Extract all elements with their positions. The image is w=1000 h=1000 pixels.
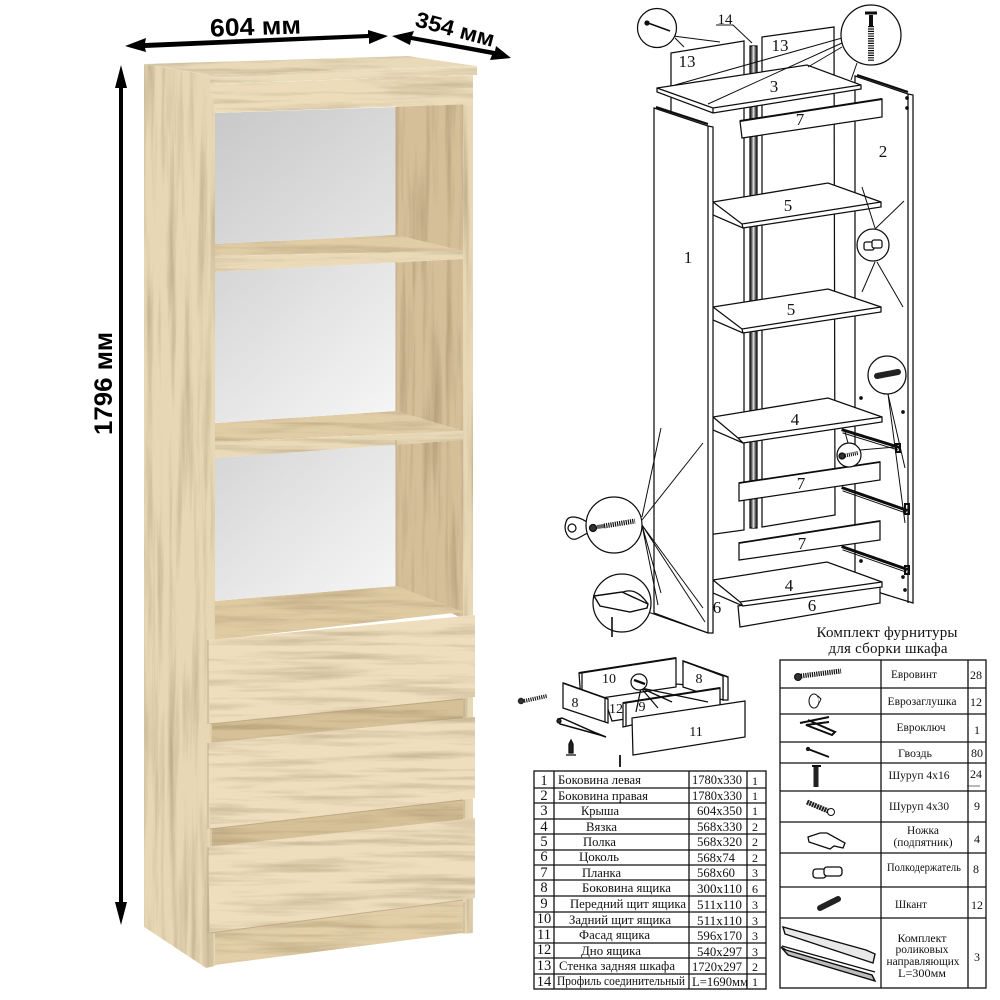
- icons: [781, 671, 875, 981]
- icon: euro screw: [794, 671, 841, 680]
- drawer runners: [843, 430, 909, 574]
- icon: shelf pin: [813, 867, 842, 878]
- hardware names: Полкодержатель: [887, 862, 961, 874]
- table quantities: 1: [752, 774, 758, 788]
- hardware names: роликовых: [896, 944, 949, 956]
- table quantities: 3: [752, 866, 758, 880]
- table row numbers: 11: [537, 927, 551, 943]
- table quantities: 1: [752, 975, 758, 989]
- drawer callout: [631, 674, 708, 712]
- part numbers on diagram: 5: [784, 196, 792, 215]
- callout: euro screw: [841, 5, 901, 65]
- hardware names: (подпятник): [894, 837, 953, 849]
- table part names: Стенка задняя шкафа: [559, 959, 675, 973]
- callout: dowel: [868, 356, 906, 394]
- callout: small screw: [837, 443, 861, 467]
- right front post: [463, 80, 473, 934]
- leader lines: [642, 36, 905, 633]
- drawer 3: [208, 818, 475, 933]
- heading: hardware kit: Комплект фурнитуры: [816, 625, 958, 641]
- table sizes: 1720х297: [692, 960, 742, 974]
- heading: hardware kit: [816, 625, 958, 657]
- dimension: depth arrow and label: 354 мм: [413, 7, 497, 52]
- drawer part numbers: 12: [609, 702, 623, 717]
- table row numbers: 5: [540, 834, 548, 850]
- table part names: Боковина правая: [558, 789, 648, 803]
- hardware names: Шуруп 4х16: [888, 770, 950, 782]
- hardware quantities: 12: [971, 898, 983, 912]
- drawer part numbers: [572, 672, 703, 740]
- plinth 6: [738, 583, 880, 627]
- table sizes: 1780х330: [692, 773, 742, 787]
- dimension: height arrow and label: [90, 65, 127, 925]
- hardware quantities: 3: [974, 950, 980, 964]
- table part names: Фасад ящика: [579, 928, 650, 942]
- dimension: depth arrow and label: [392, 7, 511, 60]
- icon: nail: [806, 747, 829, 757]
- icon: foot: [808, 833, 845, 849]
- hardware names: Евроключ: [896, 722, 946, 734]
- table part names: Крыша: [581, 804, 619, 818]
- table sizes: 568х320: [697, 835, 742, 849]
- part numbers on diagram: 13: [678, 52, 696, 71]
- drawer left side 8: [563, 683, 608, 723]
- hardware quantities: 9: [974, 799, 980, 813]
- icon: euro key: [800, 717, 835, 735]
- left side panel 1: [654, 107, 713, 633]
- table quantities: 3: [752, 945, 758, 959]
- drawer gaps and plinth: [212, 697, 463, 965]
- table row numbers: 6: [540, 849, 548, 865]
- table part names: Планка: [582, 866, 621, 880]
- icon: euro cap: [809, 694, 821, 708]
- hardware names: направляющих: [886, 956, 960, 968]
- hardware names: Шуруп 4х30: [889, 801, 949, 813]
- part numbers on diagram: 7: [796, 110, 805, 129]
- table part names: [557, 773, 686, 988]
- table part names: Передний щит ящика: [570, 897, 686, 911]
- table part names: Цоколь: [579, 850, 619, 864]
- drawer part numbers: 10: [602, 672, 616, 687]
- hardware names: [886, 669, 961, 980]
- table quantities: 2: [752, 960, 758, 974]
- table row numbers: [537, 773, 552, 990]
- table: hardware kit: [780, 660, 986, 988]
- table part names: Боковина левая: [558, 773, 641, 787]
- stray mark: [619, 755, 621, 767]
- left outer side panel: [144, 64, 215, 968]
- table row numbers: 10: [537, 911, 551, 927]
- table sizes: L=1690мм: [692, 975, 748, 989]
- table part names: Полка: [583, 835, 616, 849]
- back panels 13: [671, 27, 835, 540]
- hardware quantities: 4: [974, 832, 980, 846]
- hardware names: L=300мм: [898, 968, 947, 980]
- hardware quantities: [970, 668, 983, 964]
- hardware names: Гвоздь: [898, 748, 932, 760]
- hardware quantities: 24: [970, 767, 982, 781]
- lower shelf: [215, 411, 463, 458]
- callout: shelf pin: [857, 229, 889, 261]
- hardware quantities: 80: [971, 746, 983, 760]
- drawer exploded diagram: [518, 658, 745, 767]
- hardware names: Ножка: [907, 825, 939, 837]
- table quantities: 3: [752, 898, 758, 912]
- hardware names: Комплект: [898, 933, 946, 945]
- table row numbers: 4: [540, 819, 548, 835]
- part numbers on diagram: 6: [713, 598, 721, 617]
- part numbers on diagram: 13: [772, 36, 788, 55]
- callout: euro screw with key: [565, 497, 642, 553]
- tie 4 upper: [713, 398, 882, 443]
- table sizes: 604х350: [697, 804, 742, 818]
- table quantities: 2: [752, 851, 758, 865]
- drawer front 9: [623, 688, 720, 727]
- shelf 5 lower: [713, 289, 881, 333]
- drawer 1: [208, 615, 475, 724]
- heading: hardware kit: для сборки шкафа: [828, 641, 948, 657]
- table: parts list: [534, 771, 766, 990]
- hardware names: Евровинт: [891, 669, 937, 681]
- drawer right side 8: [683, 661, 728, 700]
- top rail: [210, 75, 473, 113]
- table row numbers: 9: [540, 896, 548, 912]
- table row numbers: 13: [537, 958, 551, 974]
- table sizes: 540х297: [697, 945, 742, 959]
- part numbers on diagram: [678, 12, 887, 617]
- cabinet floor: [215, 586, 463, 640]
- table part names: Вязка: [586, 820, 617, 834]
- table part names: Профиль соединительный: [557, 974, 685, 988]
- drawer edge shading: [208, 107, 464, 933]
- label 14 leader: [716, 25, 752, 43]
- rail 7 lower: [739, 521, 880, 560]
- table quantities: 1: [752, 804, 758, 818]
- icon: screw 4x30: [807, 802, 834, 816]
- back wall of shelves: [215, 107, 396, 601]
- table quantities: [752, 774, 758, 989]
- table part names: Задний щит ящика: [569, 913, 671, 927]
- part numbers on diagram: 3: [770, 77, 778, 96]
- drawer facade 11: [632, 701, 745, 755]
- table row numbers: 8: [540, 880, 548, 896]
- hardware quantities: 12: [970, 695, 982, 709]
- part numbers on diagram: 14: [718, 12, 733, 28]
- table sizes: 1780х330: [692, 789, 742, 803]
- table row numbers: 7: [540, 865, 548, 881]
- drawer bottom 12: [603, 684, 720, 721]
- table quantities: 2: [752, 820, 758, 834]
- part numbers on diagram: 7: [798, 534, 807, 553]
- table part names: Боковина ящика: [582, 881, 671, 895]
- right interior side panel: [396, 103, 467, 620]
- hardware quantities: 8: [973, 862, 979, 876]
- top board: [144, 56, 477, 84]
- drawer back 10: [579, 658, 676, 701]
- assembly diagram: [565, 5, 913, 637]
- part numbers on diagram: 6: [808, 596, 816, 615]
- table sizes: [692, 773, 748, 989]
- part numbers on diagram: 4: [785, 576, 794, 595]
- part numbers on diagram: 7: [797, 474, 806, 493]
- table quantities: 3: [752, 914, 758, 928]
- upper shelf: [215, 235, 463, 272]
- illustration: oak bookcase with three drawers: [144, 56, 477, 968]
- table row numbers: 14: [537, 974, 552, 990]
- icon: euro screw: [518, 696, 547, 704]
- drawer part numbers: 11: [689, 725, 703, 740]
- hardware grid: [780, 660, 986, 988]
- drawer part numbers: 9: [638, 700, 646, 715]
- part numbers on diagram: 1: [684, 248, 692, 267]
- table row numbers: 1: [540, 773, 548, 789]
- dimension: height arrow and label: 1796 мм: [90, 332, 118, 435]
- table quantities: 1: [752, 789, 758, 803]
- part numbers on diagram: 5: [787, 300, 795, 319]
- table quantities: 3: [752, 929, 758, 943]
- part numbers on diagram: 4: [791, 410, 800, 429]
- drawer part numbers: 8: [696, 672, 702, 687]
- callout: foot with nail: [593, 574, 651, 637]
- hardware names: Еврозаглушка: [888, 696, 956, 708]
- tie 4 lower: [713, 562, 882, 606]
- right side panel 2: [855, 75, 913, 603]
- dimension: width arrow and label: [125, 11, 388, 52]
- top board 3: [657, 65, 861, 113]
- table sizes: 300х110: [697, 882, 742, 896]
- icon: roller guide: [781, 927, 875, 981]
- drawer 2: [208, 717, 475, 829]
- table part names: Дно ящика: [581, 944, 641, 958]
- rail 7 middle: [739, 462, 880, 501]
- connecting profile 14: [750, 46, 757, 528]
- table sizes: 568х74: [697, 851, 736, 865]
- table sizes: 511х110: [697, 914, 742, 928]
- part numbers on diagram: 2: [879, 142, 887, 161]
- icon: nail guide rail: [557, 718, 606, 737]
- hardware quantities: 28: [970, 668, 982, 682]
- hardware quantities: 1: [974, 723, 980, 737]
- callout: nail: [638, 8, 676, 48]
- icon: small screw: [566, 740, 576, 755]
- table sizes: 568х60: [697, 866, 735, 880]
- table row numbers: 2: [540, 788, 548, 804]
- table quantities: 2: [752, 835, 758, 849]
- table row numbers: 3: [540, 803, 548, 819]
- table grid: [534, 771, 766, 989]
- hardware names: Шкант: [895, 899, 927, 911]
- table sizes: 511х110: [697, 898, 742, 912]
- icon: screw 4x16: [812, 765, 821, 787]
- drawer part numbers: 8: [572, 696, 578, 711]
- shelf 5 upper: [713, 183, 881, 228]
- dimension: width arrow and label: 604 мм: [210, 11, 301, 43]
- table row numbers: 12: [537, 942, 551, 958]
- table quantities: 6: [752, 882, 758, 896]
- table sizes: 596х170: [697, 929, 742, 943]
- table sizes: 568х330: [697, 820, 742, 834]
- rail 7 top: [740, 99, 882, 138]
- icon: dowel: [820, 899, 838, 908]
